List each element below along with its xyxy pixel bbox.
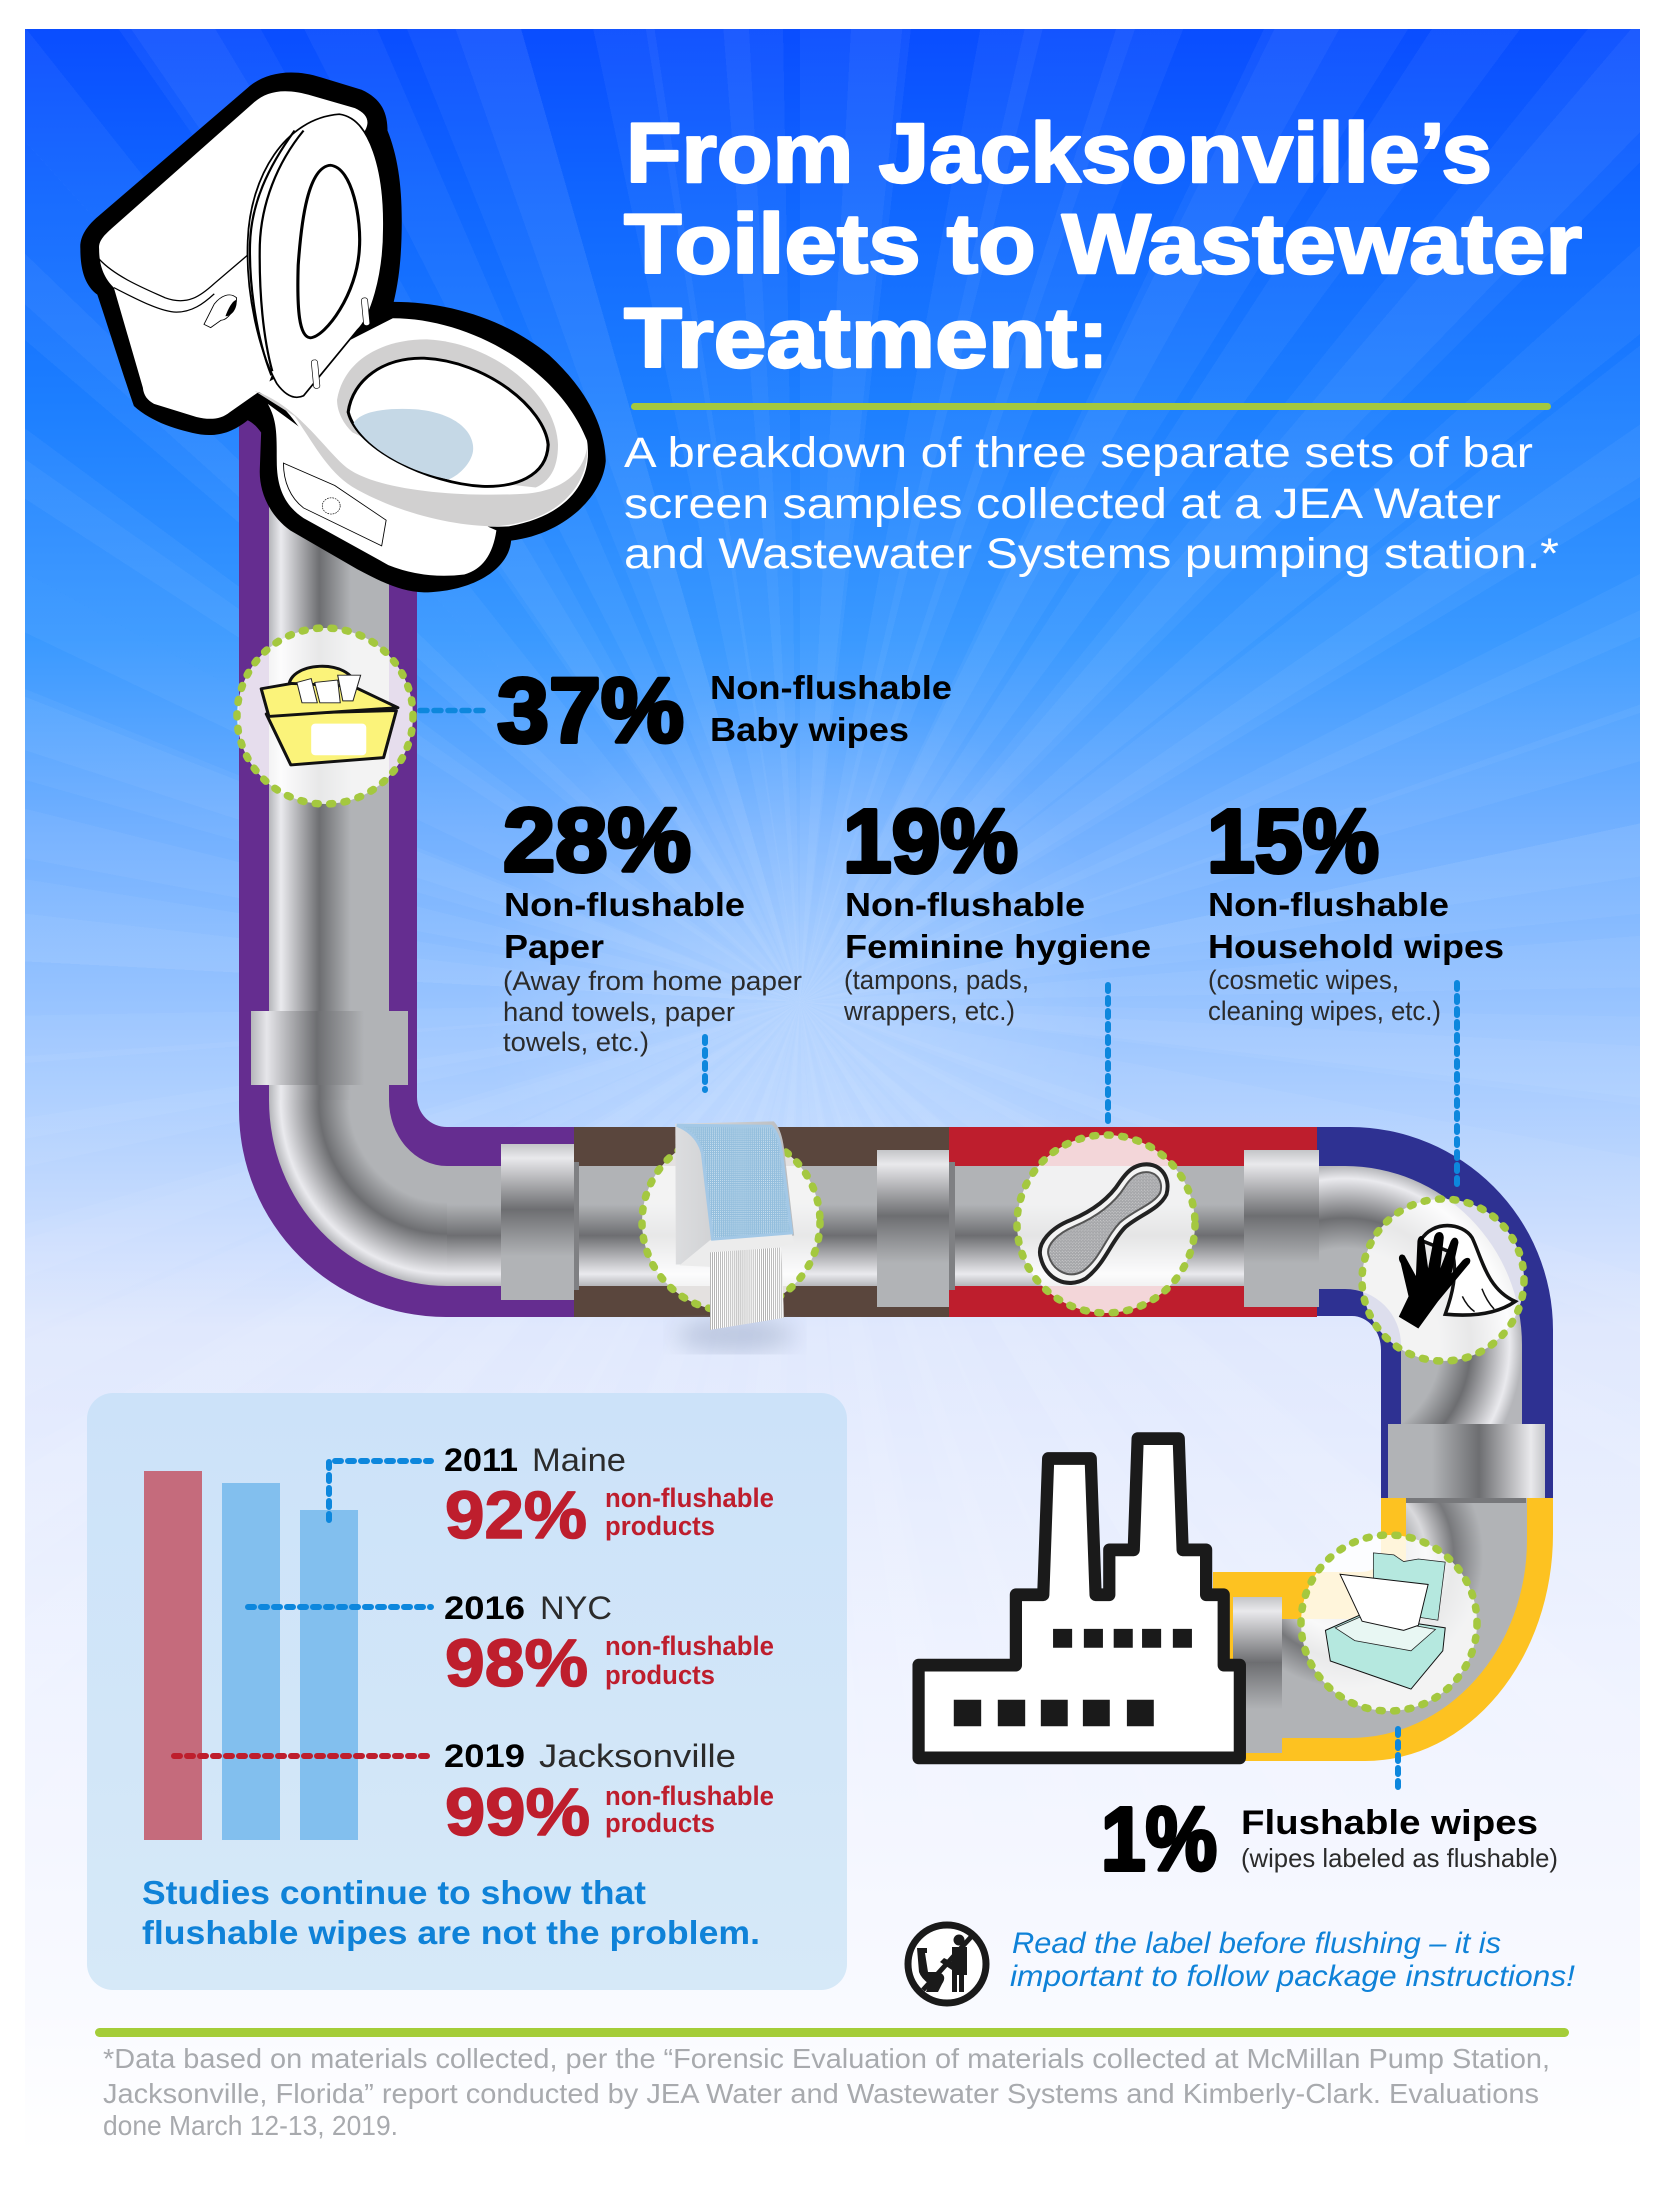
panel: other studies [87, 1393, 847, 1990]
footer divider [95, 2028, 1569, 2037]
pipe section: brown casing [574, 1127, 949, 1317]
metal pipe: lower elbow [1282, 1498, 1527, 1738]
subtitle [624, 429, 1559, 578]
metal pipe: right elbow [1319, 1166, 1522, 1424]
stat: 1% flushable wipes: 1% [1101, 1790, 1217, 1890]
pipe section: navy casing [1317, 1127, 1553, 1498]
pipe seam: lower elbow [1406, 1498, 1526, 1503]
pipe section: red casing [949, 1127, 1317, 1317]
stat: 15% household wipes: (cosmetic wipes, [1208, 965, 1399, 995]
study: 2011 Maine: non-flushable [605, 1483, 774, 1513]
pipe section: yellow casing [1213, 1498, 1553, 1761]
stat: 1% flushable wipes: (wipes labeled as flushable) [1241, 1843, 1558, 1873]
study: 2016 NYC: products [605, 1660, 715, 1690]
connector: feminine hygiene [1105, 985, 1111, 1124]
flushing advice: Read the label before flushing – it is [1012, 1927, 1501, 1960]
coupler: factory inlet [1233, 1597, 1282, 1753]
connector: 2011 [329, 1461, 431, 1520]
stat: 37% baby wipes: Baby wipes [710, 711, 909, 748]
stat: 28% paper: Paper [504, 928, 604, 965]
pipe system [239, 415, 1553, 1761]
stat: 19% feminine hygiene: 19% [843, 792, 1018, 892]
study: 2016 NYC [444, 1590, 774, 1701]
study: 2016 NYC: 98% [445, 1626, 588, 1701]
footnote: Jacksonville, Florida” report conducted by JEA Water and Wastewater Systems and Kimberly-Clark. Evaluations [103, 2078, 1539, 2109]
title: From Jacksonville’s [626, 106, 1492, 200]
flushing advice [1010, 1927, 1576, 1993]
icon: flushable wipes box [1301, 1535, 1477, 1711]
footnote: *Data based on materials collected, per the “Forensic Evaluation of materials collected at McMillan Pump Station, [103, 2043, 1550, 2074]
study: 2019 Jacksonville: 99% [445, 1775, 590, 1850]
metal pipe: left elbow [269, 1100, 447, 1286]
footnote: done March 12-13, 2019. [103, 2110, 398, 2141]
stat: 19% feminine hygiene [843, 792, 1151, 1026]
stat: 28% paper: hand towels, paper [503, 997, 735, 1027]
study: 2019 Jacksonville: Jacksonville [539, 1738, 736, 1774]
pipe section: purple casing [239, 415, 574, 1317]
title [624, 106, 1582, 385]
study: 2011 Maine: products [605, 1511, 715, 1541]
icon: treatment plant factory [919, 1439, 1240, 1758]
connector: baby wipes [420, 708, 486, 713]
stat: 1% flushable wipes: Flushable wipes [1241, 1804, 1538, 1842]
subtitle: screen samples collected at a JEA Water [624, 480, 1501, 528]
coupler: vertical [251, 1011, 408, 1085]
study: 2011 Maine: 2011 [444, 1442, 518, 1478]
coupler: navy to yellow [1388, 1424, 1545, 1498]
title: Treatment: [624, 291, 1109, 385]
flushing advice: important to follow package instructions! [1010, 1960, 1576, 1993]
title: Toilets to Wastewater [624, 197, 1582, 291]
stat: 37% baby wipes [497, 660, 952, 762]
stat: 28% paper: 28% [503, 791, 691, 891]
coupler: brown to red [877, 1150, 949, 1307]
panel conclusion text [142, 1874, 760, 1951]
study: 2011 Maine [444, 1442, 774, 1553]
stat: 28% paper [503, 791, 802, 1057]
study: 2019 Jacksonville [444, 1738, 774, 1850]
footnote [103, 2043, 1550, 2141]
study: 2011 Maine: 92% [445, 1478, 587, 1553]
study: 2019 Jacksonville: products [605, 1808, 715, 1838]
stat: 15% household wipes: Non-flushable [1208, 886, 1449, 923]
study: 2016 NYC: 2016 [444, 1590, 525, 1626]
coupler: purple to brown [501, 1144, 574, 1300]
stat: 15% household wipes: Household wipes [1208, 928, 1504, 965]
pipe seam: red section [949, 1162, 955, 1290]
stat: 19% feminine hygiene: wrappers, etc.) [843, 996, 1015, 1026]
icon: sanitary pad [1017, 1135, 1195, 1313]
connector: flushable wipes [1395, 1729, 1401, 1792]
stat: 15% household wipes: cleaning wipes, etc.) [1208, 996, 1441, 1026]
study: 2019 Jacksonville: 2019 [444, 1738, 525, 1774]
title divider [631, 403, 1551, 410]
connector: 2019 [174, 1753, 431, 1759]
study: 2011 Maine: Maine [532, 1442, 626, 1478]
panel conclusion text: Studies continue to show that [142, 1874, 646, 1911]
icon: hand with household wipe [1362, 1199, 1524, 1361]
icon: do not flush symbol [908, 1925, 986, 2003]
study: 2019 Jacksonville: non-flushable [605, 1781, 774, 1811]
stat: 15% household wipes: 15% [1207, 792, 1379, 892]
stat: 28% paper: (Away from home paper [503, 966, 802, 996]
stat: 37% baby wipes: Non-flushable [710, 669, 952, 706]
bar chart: three study bars [144, 1471, 358, 1840]
subtitle: and Wastewater Systems pumping station.* [624, 530, 1559, 578]
coupler: red to navy [1244, 1150, 1319, 1307]
stat: 15% household wipes [1207, 792, 1504, 1026]
subtitle: A breakdown of three separate sets of bar [624, 429, 1533, 477]
connector: household wipes [1454, 983, 1460, 1189]
stat: 1% flushable wipes [1101, 1790, 1558, 1890]
connector: paper [702, 1037, 708, 1090]
study: 2016 NYC: NYC [540, 1590, 612, 1626]
stat: 28% paper: Non-flushable [504, 886, 745, 923]
pipe seam: brown section [574, 1162, 579, 1290]
study: 2016 NYC: non-flushable [605, 1631, 774, 1661]
metal pipe: vertical left [269, 505, 389, 1100]
stat: 19% feminine hygiene: Non-flushable [845, 886, 1085, 923]
stat: 28% paper: towels, etc.) [503, 1027, 649, 1057]
icon: toilet [80, 72, 606, 592]
icon: paper towel dispenser [642, 1121, 820, 1351]
connector: 2016 [248, 1604, 431, 1610]
stat: 19% feminine hygiene: (tampons, pads, [844, 965, 1029, 995]
metal pipe: horizontal run [447, 1166, 1320, 1286]
icon: baby wipes tub [237, 628, 413, 804]
stat: 37% baby wipes: 37% [497, 660, 684, 762]
panel conclusion text: flushable wipes are not the problem. [142, 1914, 760, 1951]
stat: 19% feminine hygiene: Feminine hygiene [845, 928, 1151, 965]
